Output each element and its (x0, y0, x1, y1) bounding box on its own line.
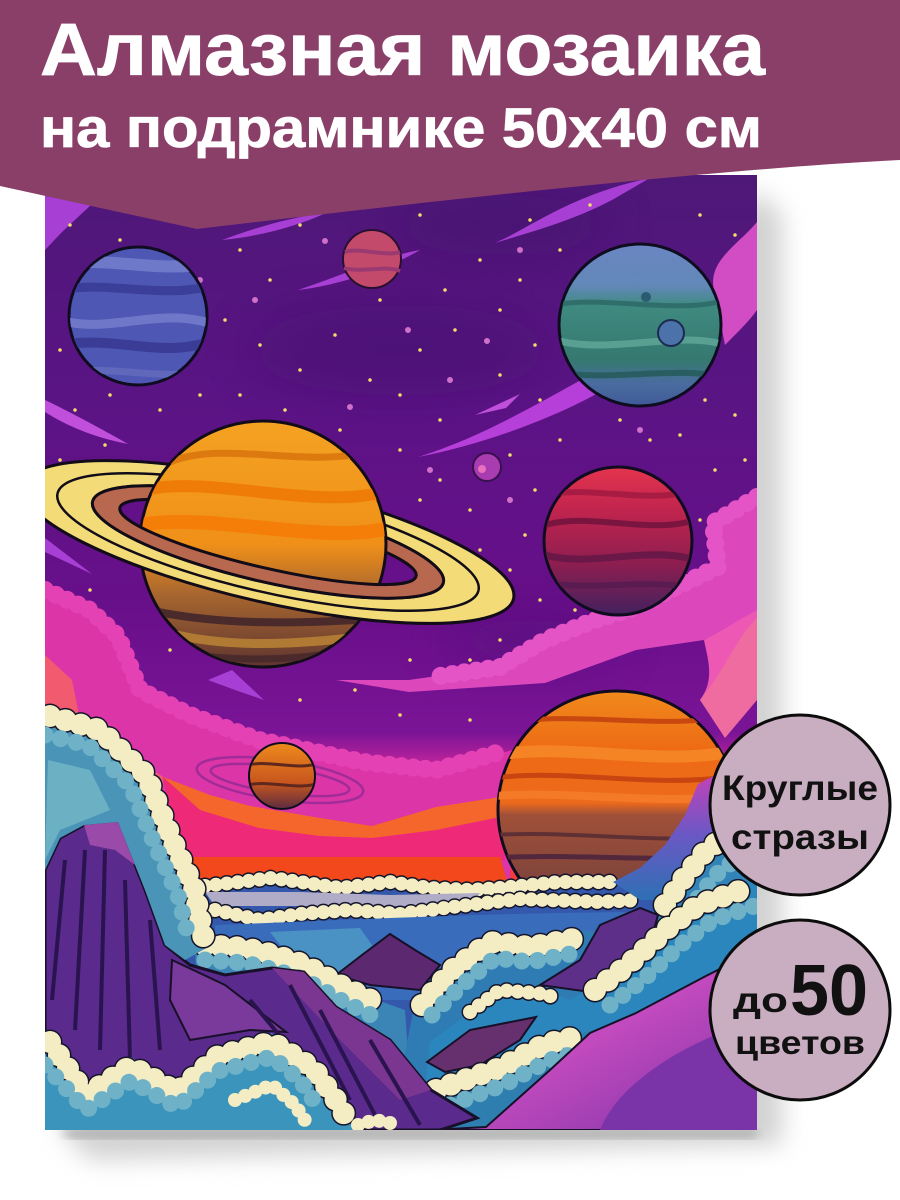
banner shape (0, 0, 900, 229)
far clouds (186, 870, 656, 1042)
planet: crimson (544, 467, 695, 615)
pink cloud: right (336, 497, 757, 720)
planet: large orange (496, 690, 724, 880)
Saturn body (140, 421, 386, 667)
badge: round rhinestones: Круглые (722, 769, 878, 808)
foreground clouds: bottom left (45, 1030, 400, 1130)
badge: up to 50 colours (710, 920, 890, 1100)
foreground clouds: left blue (45, 710, 212, 960)
Saturn ring: front (45, 493, 515, 625)
planet: Saturn (9, 421, 527, 667)
title: Алмазная мозаика (40, 8, 766, 91)
cloud tiers right (426, 878, 757, 1082)
planet: blue (60, 247, 215, 385)
right purple-blue cloud (613, 776, 749, 922)
badge: round rhinestones: стразы (731, 818, 869, 857)
top banner (0, 0, 900, 229)
low purple rock (427, 1017, 536, 1072)
planet: green-blue (555, 244, 725, 406)
mid clouds centre right (404, 926, 594, 1081)
badge: up to 50 colours: до (733, 981, 788, 1020)
main purple mountains (45, 822, 477, 1130)
small distant mountain (336, 934, 440, 990)
planet: small red top (343, 230, 401, 288)
sky background (45, 175, 757, 880)
violet wisps (45, 178, 650, 700)
dark nebula patches (288, 324, 568, 661)
stars (60, 205, 745, 720)
badge: round rhinestones (710, 715, 890, 895)
foreground cloud: pink right (445, 968, 757, 1130)
lower centre cloud (420, 1030, 600, 1130)
subtitle: на подрамнике 50х40 см (40, 96, 762, 159)
painting: space scene (9, 175, 757, 1130)
mid clouds left (195, 934, 408, 1055)
planet: small orange with swirl (194, 743, 366, 811)
badge: up to 50 colours: цветов (735, 1024, 865, 1061)
pink peach cloud lower right (700, 618, 757, 738)
pink nebula upper right (713, 222, 757, 345)
canvas drop shadow (60, 190, 782, 1160)
pink cloud: left (45, 587, 513, 890)
planet: tiny pink moon (473, 453, 501, 481)
Saturn ring: back (45, 459, 516, 625)
right purple rock (540, 908, 658, 992)
badge: up to 50 colours: 50 (790, 951, 868, 1031)
sunset orange band (163, 777, 505, 860)
